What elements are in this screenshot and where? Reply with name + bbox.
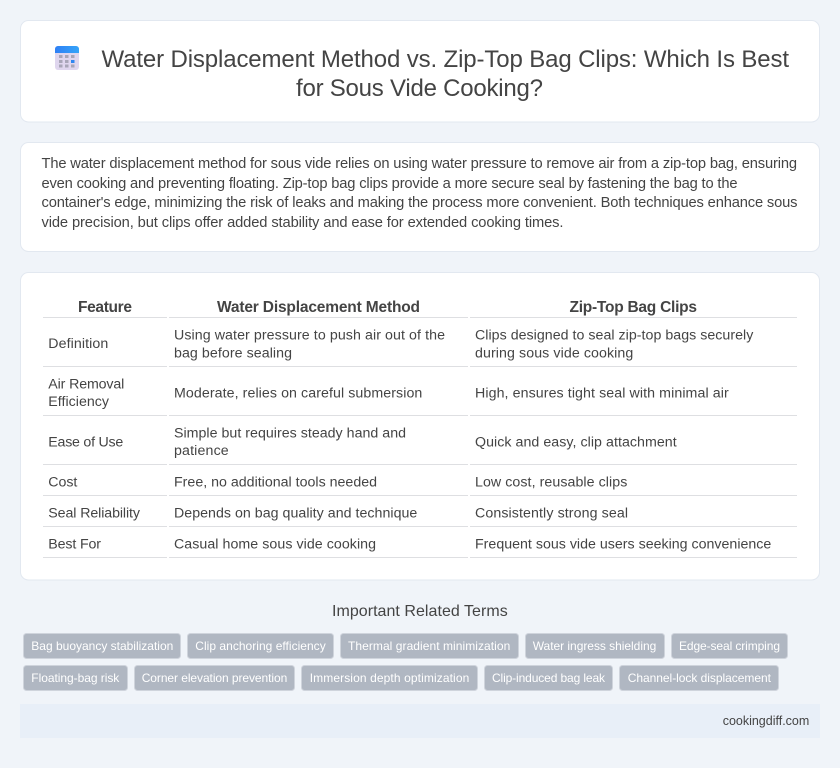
row: air removal efficiency xyxy=(43,376,797,416)
tags: related terms xyxy=(24,634,788,690)
tag xyxy=(134,666,294,690)
title xyxy=(102,46,789,102)
description text: container's edge, minimizing the risk of leaks and making the process more convenient. Both techniques enhance sous xyxy=(42,195,798,211)
tag: Clip anchoring efficiency xyxy=(195,639,326,653)
tag xyxy=(24,634,180,658)
row: air removal efficiency: Efficiency xyxy=(48,394,110,410)
row: cost: Free, no additional tools needed xyxy=(174,474,377,490)
footer: cookingdiff.com xyxy=(723,714,809,728)
panel: comparison table xyxy=(20,272,820,580)
row: seal reliability xyxy=(43,505,797,527)
row: definition: during sous vide cooking xyxy=(475,345,633,361)
heading: related terms: Important Related Terms xyxy=(332,603,508,620)
row: seal reliability: Depends on bag quality and technique xyxy=(174,505,417,521)
title: Water Displacement Method vs. Zip-Top Bag Clips: Which Is Best xyxy=(102,46,789,73)
row: air removal efficiency: Moderate, relies on careful submersion xyxy=(174,385,422,401)
tag: Immersion depth optimization xyxy=(310,671,469,685)
row: definition: Clips designed to seal zip-top bags securely xyxy=(475,327,754,343)
table header: Zip-Top Bag Clips xyxy=(570,299,697,316)
table header xyxy=(43,299,797,318)
description text: vide precision, but clips offer added stability and ease for extended cooking times. xyxy=(42,215,564,231)
tag xyxy=(620,666,778,690)
tag: Clip-induced bag leak xyxy=(492,671,606,685)
tag xyxy=(188,634,334,658)
table header: Water Displacement Method xyxy=(217,299,420,316)
row: cost: Low cost, reusable clips xyxy=(475,474,627,490)
row: air removal efficiency: Air Removal xyxy=(48,376,124,392)
tag xyxy=(24,666,128,690)
description text: even cooking and preventing floating. Zip-top bag clips provide a more secure seal by fastening the bag to the xyxy=(42,176,738,192)
row: ease of use: Ease of Use xyxy=(48,434,123,450)
tag xyxy=(484,666,612,690)
title: for Sous Vide Cooking? xyxy=(296,75,543,102)
tag: Thermal gradient minimization xyxy=(348,639,510,653)
row: best for: Frequent sous vide users seeking convenience xyxy=(475,536,771,552)
panel: description xyxy=(20,142,820,252)
tag: Edge-seal crimping xyxy=(679,639,780,653)
tag: Floating-bag risk xyxy=(31,671,120,685)
tag: Bag buoyancy stabilization xyxy=(31,639,173,653)
tag: Channel-lock displacement xyxy=(628,671,772,685)
row: ease of use xyxy=(43,425,797,465)
tag: Corner elevation prevention xyxy=(142,671,287,685)
table header: Feature xyxy=(78,299,132,316)
row: definition xyxy=(43,327,797,367)
row: best for: Best For xyxy=(48,536,101,552)
description text: The water displacement method for sous vide relies on using water pressure to remove air from a zip-top bag, ensuring xyxy=(42,156,797,172)
footer xyxy=(20,704,820,738)
row: cost xyxy=(43,474,797,496)
row: ease of use: Quick and easy, clip attachment xyxy=(475,434,677,450)
row: cost: Cost xyxy=(48,474,77,490)
row: definition: Using water pressure to push air out of the xyxy=(174,327,445,343)
tag xyxy=(340,634,518,658)
icon: calendar xyxy=(55,46,79,70)
row: best for: Casual home sous vide cooking xyxy=(174,536,376,552)
row: definition: bag before sealing xyxy=(174,345,292,361)
tag xyxy=(526,634,664,658)
tag xyxy=(302,666,478,690)
panel: title card xyxy=(20,20,820,122)
row: air removal efficiency: High, ensures tight seal with minimal air xyxy=(475,385,729,401)
row: seal reliability: Seal Reliability xyxy=(48,505,141,521)
tag xyxy=(672,634,788,658)
row: ease of use: Simple but requires steady hand and xyxy=(174,425,406,441)
row: best for xyxy=(43,536,797,558)
tag: Water ingress shielding xyxy=(533,639,656,653)
row: ease of use: patience xyxy=(174,443,229,459)
row: seal reliability: Consistently strong seal xyxy=(475,505,628,521)
description text xyxy=(42,156,798,231)
row: definition: Definition xyxy=(48,336,108,352)
